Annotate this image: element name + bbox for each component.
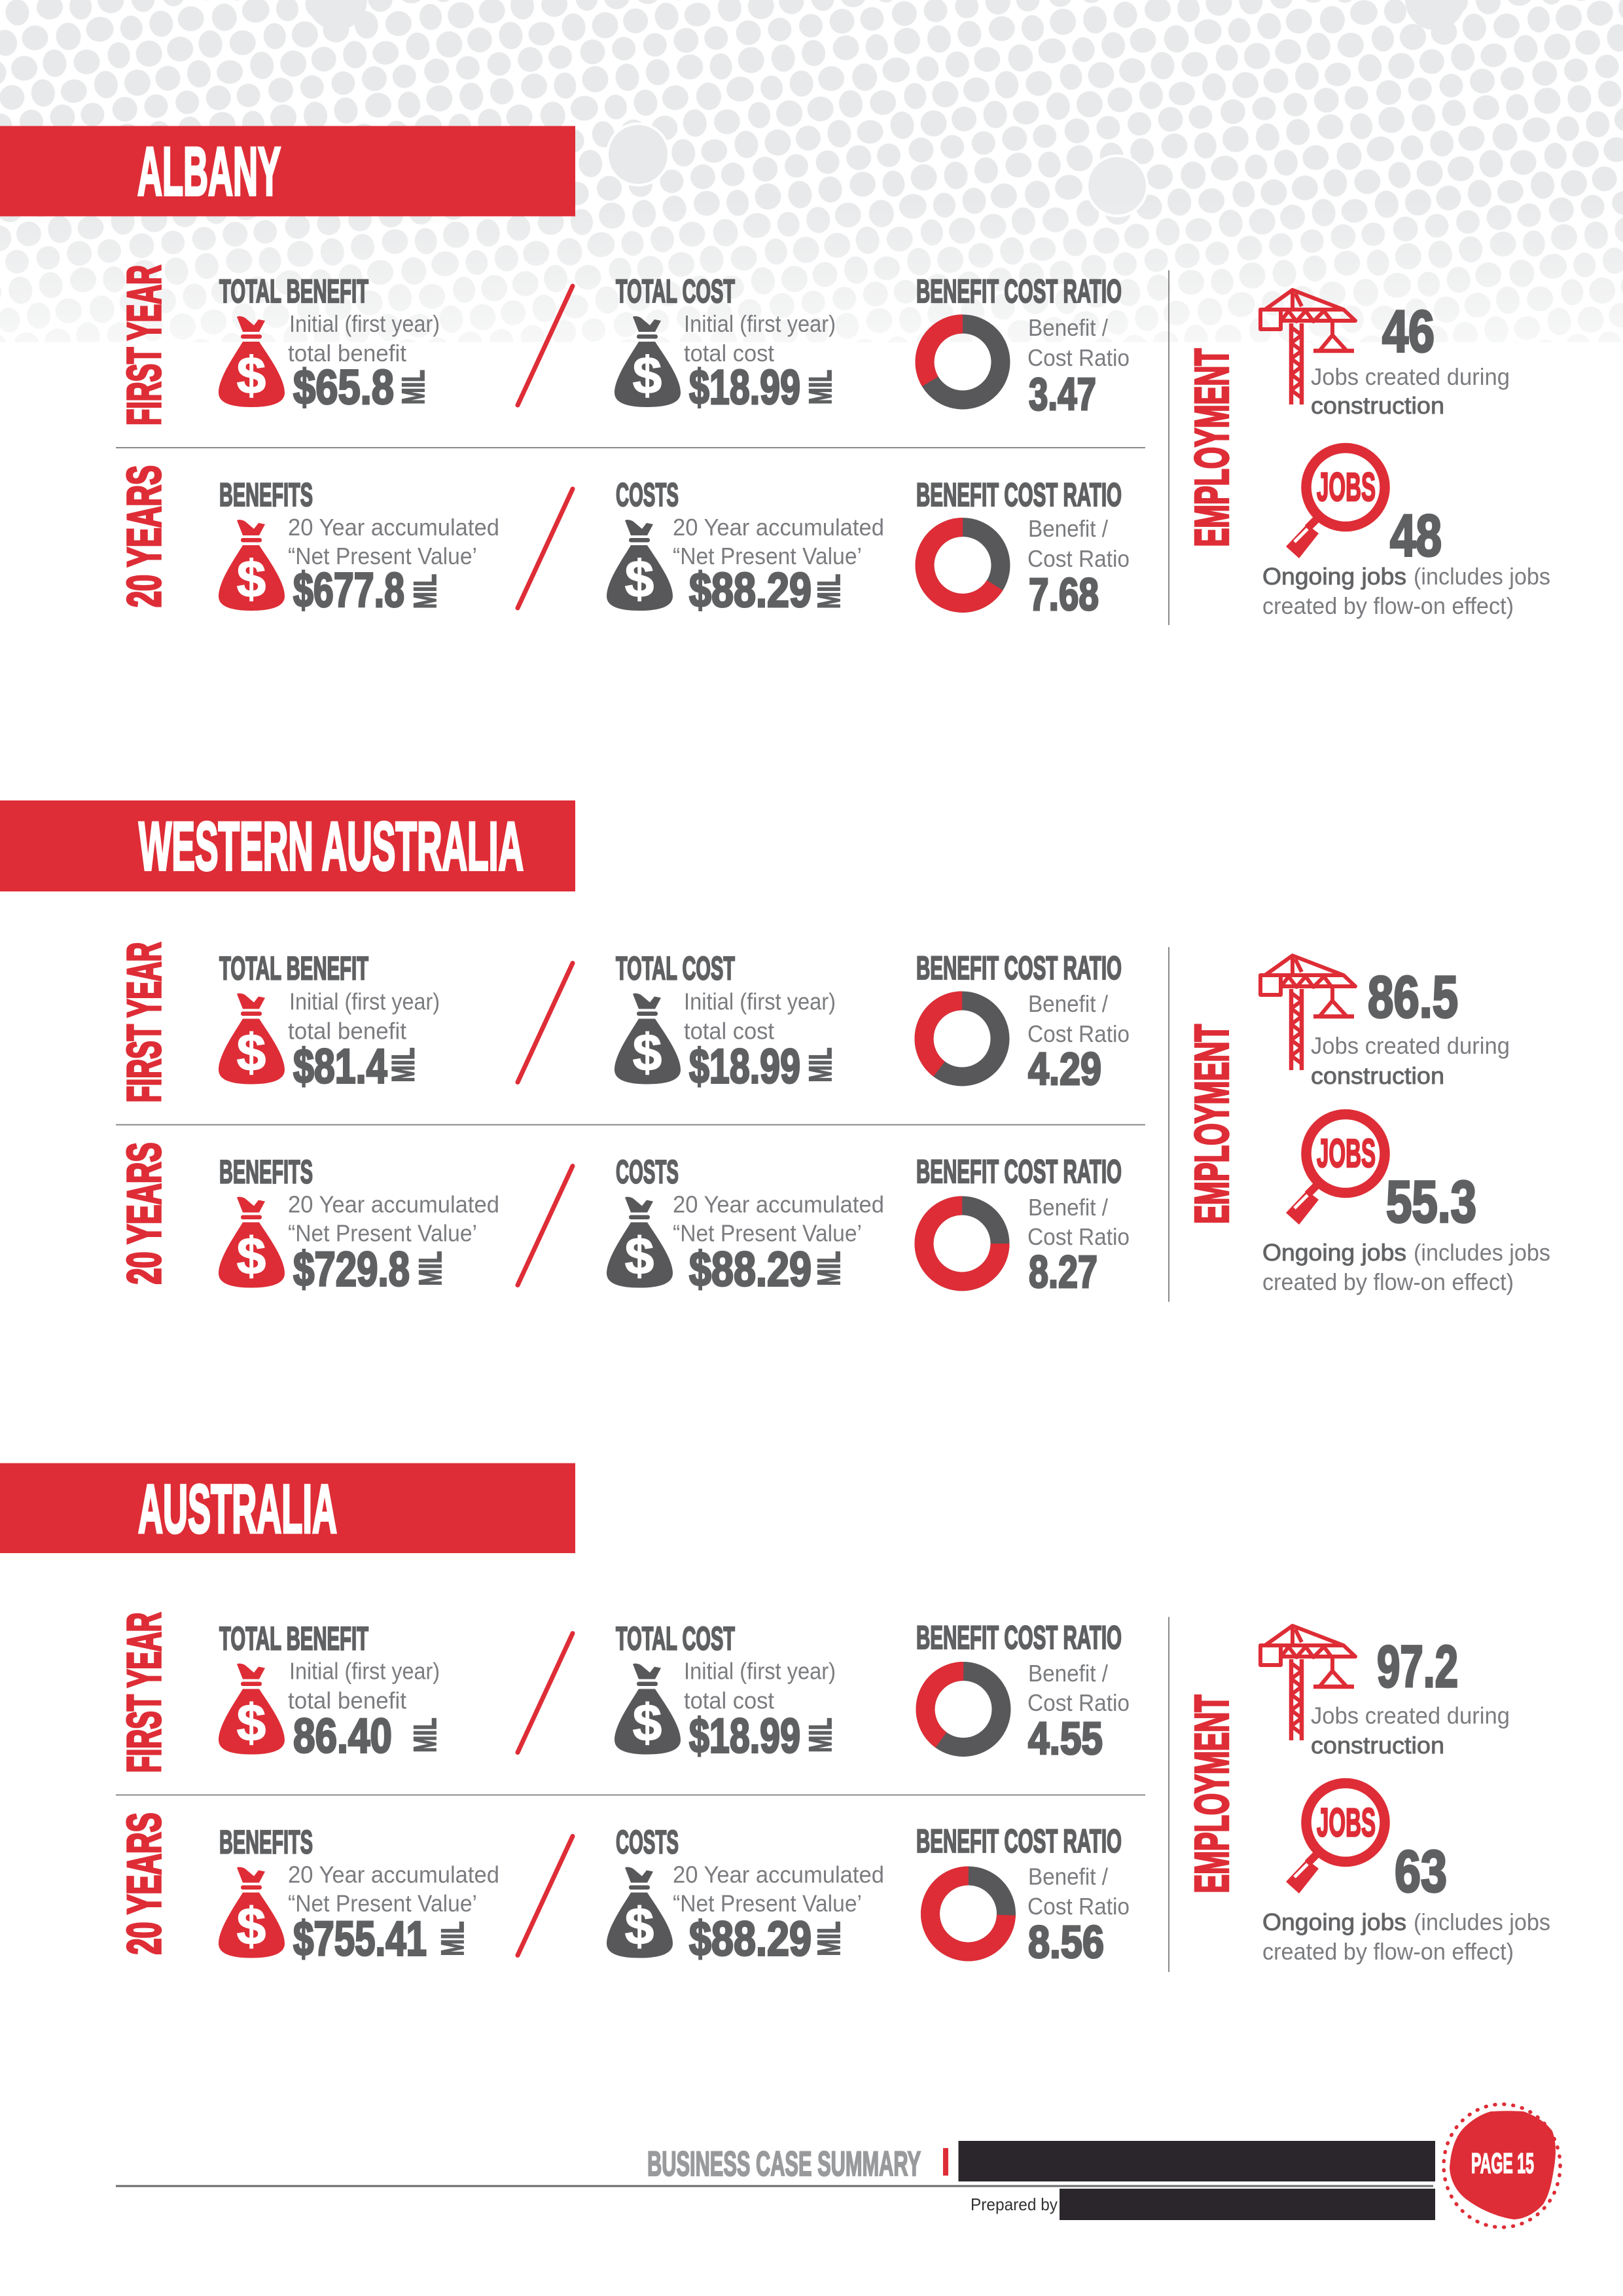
employment block (1186, 290, 1550, 619)
total cost block: MIL (804, 370, 838, 404)
benefits block: $ (237, 550, 266, 608)
total cost block: TOTAL COST (616, 950, 735, 987)
employment block: JOBS (1317, 1800, 1376, 1844)
redacted bar: bottom (1060, 2189, 1435, 2220)
benefits block: MIL (408, 574, 443, 609)
costs block: 20 Year accumulated (673, 1191, 884, 1217)
employment block: (includes jobs (1414, 1909, 1550, 1935)
benefits block: BENEFITS (219, 1823, 313, 1860)
benefit cost ratio 20 years: BENEFIT COST RATIO (916, 1823, 1122, 1859)
total cost block: MIL (804, 1047, 838, 1083)
benefits block: 20 Year accumulated (288, 1861, 499, 1888)
page badge (1444, 2104, 1560, 2227)
benefits block: BENEFITS (219, 1153, 313, 1190)
benefit cost ratio 20 years: 8.27 (1029, 1246, 1097, 1297)
benefits block: 20 Year accumulated (288, 514, 499, 541)
employment block: 63 (1395, 1839, 1447, 1905)
employment block (1186, 956, 1550, 1295)
costs block: $88.29 (689, 563, 812, 617)
benefit cost ratio first year: Benefit / (1028, 314, 1108, 341)
total benefit block: TOTAL BENEFIT (219, 1621, 368, 1657)
row label: 20 years: 20 YEARS (118, 465, 171, 607)
benefits block (219, 1823, 499, 1966)
benefit cost ratio first year: 4.29 (1028, 1043, 1101, 1094)
left columns, first year and 20 years (116, 942, 1145, 1296)
slash divider (518, 1166, 573, 1285)
total cost block: total cost (684, 1017, 774, 1045)
costs block: COSTS (616, 1153, 679, 1190)
employment block: construction (1311, 392, 1444, 419)
benefit cost ratio first year: Cost Ratio (1027, 1689, 1130, 1716)
benefits block: $ (237, 1227, 266, 1285)
benefits block: BENEFITS (219, 476, 313, 513)
total benefit block: total benefit (288, 1017, 406, 1045)
slash divider (518, 1837, 573, 1956)
benefit cost ratio 20 years: Cost Ratio (1027, 1223, 1130, 1250)
heading bar: Albany: ALBANY (137, 134, 281, 210)
employment block: Jobs created during (1311, 1032, 1510, 1059)
total benefit block: TOTAL BENEFIT (219, 950, 368, 987)
benefits block: $677.8 (293, 563, 404, 617)
total benefit block: $ (237, 1024, 266, 1081)
row label: first year: FIRST YEAR (118, 265, 171, 425)
heading bar: Albany (0, 126, 575, 216)
total cost block (615, 950, 838, 1093)
footer (116, 2104, 1560, 2227)
costs block (607, 476, 884, 617)
benefit cost ratio first year: Cost Ratio (1027, 1020, 1130, 1047)
total cost block (615, 273, 838, 414)
costs block: COSTS (616, 1823, 679, 1860)
costs block: 20 Year accumulated (673, 1861, 884, 1888)
total cost block: Initial (first year) (684, 988, 836, 1014)
total cost block (615, 1621, 838, 1763)
total benefit block: $ (237, 1694, 266, 1751)
employment block: created by flow-on effect) (1262, 592, 1514, 619)
benefits block (219, 476, 499, 617)
total benefit block: $81.4 (293, 1039, 387, 1093)
costs block: $ (625, 550, 654, 608)
benefit cost ratio 20 years: BENEFIT COST RATIO (916, 1153, 1122, 1190)
total cost block: total cost (684, 1687, 774, 1713)
employment block: 46 (1382, 299, 1435, 365)
total benefit block: Initial (first year) (289, 1657, 440, 1685)
benefit cost ratio first year: 3.47 (1029, 368, 1096, 420)
total cost block: $ (633, 1024, 662, 1081)
row label: 20 years: 20 YEARS (118, 1143, 171, 1284)
costs block: $88.29 (689, 1242, 812, 1296)
total benefit block: Initial (first year) (289, 988, 440, 1014)
benefit cost ratio 20 years: Benefit / (1028, 515, 1108, 542)
total benefit block: MIL (387, 1047, 421, 1083)
total cost block: total cost (684, 340, 774, 367)
benefits block (219, 1153, 499, 1296)
total benefit block (219, 273, 440, 414)
employment block: 55.3 (1386, 1170, 1476, 1235)
employment block: JOBS (1317, 1131, 1376, 1175)
benefit cost ratio first year: BENEFIT COST RATIO (916, 950, 1122, 986)
total benefit block: Initial (first year) (289, 310, 440, 337)
employment block: construction (1311, 1732, 1444, 1759)
heading bar: Western Australia: WESTERN AUSTRALIA (139, 808, 524, 885)
employment block: EMPLOYMENT (1186, 1024, 1238, 1224)
total cost block: $18.99 (689, 360, 800, 414)
employment block: 86.5 (1368, 965, 1458, 1030)
benefit cost ratio first year (910, 1619, 1130, 1764)
employment block: JOBS (1317, 465, 1376, 509)
benefits block: “Net Present Value’ (288, 1220, 477, 1246)
costs block: “Net Present Value’ (673, 1220, 862, 1246)
benefits block: “Net Present Value’ (288, 1890, 477, 1916)
employment block: Jobs created during (1311, 1702, 1510, 1729)
total cost block: $18.99 (689, 1039, 800, 1093)
total cost block: $18.99 (689, 1708, 800, 1763)
employment block: (includes jobs (1414, 1239, 1550, 1266)
benefits block: MIL (414, 1251, 448, 1285)
row label: first year: FIRST YEAR (118, 942, 171, 1102)
left columns, first year and 20 years (116, 1613, 1145, 1966)
page badge: PAGE 15 (1471, 2147, 1534, 2179)
costs block (607, 1153, 884, 1296)
benefit cost ratio 20 years: Cost Ratio (1027, 1893, 1130, 1920)
benefit cost ratio first year: 4.55 (1028, 1713, 1103, 1764)
costs block: 20 Year accumulated (673, 514, 884, 541)
employment block: created by flow-on effect) (1262, 1938, 1514, 1965)
benefit cost ratio 20 years: 7.68 (1029, 569, 1099, 620)
benefit cost ratio 20 years (910, 476, 1130, 620)
benefit cost ratio first year (910, 273, 1130, 420)
benefit cost ratio 20 years (916, 1153, 1130, 1297)
employment block: Ongoing jobs (1262, 1239, 1406, 1266)
benefits block: MIL (436, 1922, 471, 1956)
employment block: EMPLOYMENT (1186, 348, 1238, 547)
total cost block: TOTAL COST (616, 1621, 735, 1657)
background dot pattern (0, 0, 1623, 342)
benefit cost ratio 20 years (916, 1823, 1130, 1967)
total cost block: MIL (804, 1717, 838, 1753)
costs block: MIL (812, 1251, 847, 1285)
panel: Western Australia (0, 800, 1550, 1302)
slash divider (518, 963, 573, 1083)
employment block: EMPLOYMENT (1186, 1695, 1238, 1893)
heading bar: Australia: AUSTRALIA (138, 1471, 337, 1547)
benefits block: $ (237, 1897, 266, 1956)
total benefit block: MIL (408, 1717, 443, 1753)
total benefit block: total benefit (288, 1687, 406, 1713)
benefit cost ratio first year: Cost Ratio (1027, 344, 1130, 371)
slash divider (518, 286, 573, 405)
employment block: 48 (1390, 503, 1442, 569)
employment block: construction (1311, 1062, 1444, 1089)
benefit cost ratio first year: BENEFIT COST RATIO (916, 1619, 1122, 1656)
employment block: Ongoing jobs (1262, 563, 1406, 590)
prepared by label: Prepared by (971, 2195, 1058, 2214)
costs block: $ (625, 1227, 654, 1285)
benefit cost ratio 20 years: Benefit / (1028, 1194, 1108, 1221)
panel: Albany (0, 126, 1550, 625)
heading bar: Western Australia (0, 800, 575, 891)
total cost block: TOTAL COST (616, 273, 735, 310)
total benefit block (219, 950, 440, 1093)
slash divider (518, 1634, 573, 1753)
total benefit block: $65.8 (293, 360, 394, 414)
employment block: Jobs created during (1311, 363, 1510, 390)
benefits block: 20 Year accumulated (288, 1191, 499, 1217)
benefits block: $755.41 (293, 1911, 427, 1966)
benefit cost ratio first year (909, 950, 1130, 1094)
benefit cost ratio first year: Benefit / (1028, 1660, 1108, 1687)
total benefit block: MIL (397, 370, 431, 404)
total benefit block: 86.40 (293, 1708, 392, 1763)
total benefit block (219, 1621, 443, 1763)
benefit cost ratio 20 years: BENEFIT COST RATIO (916, 476, 1122, 513)
costs block: $88.29 (689, 1911, 812, 1966)
row label: first year: FIRST YEAR (118, 1613, 171, 1772)
row label: 20 years: 20 YEARS (118, 1813, 171, 1954)
panel: Australia (0, 1463, 1550, 1972)
total cost block: Initial (first year) (684, 310, 836, 337)
total benefit block: $ (237, 346, 266, 404)
costs block (607, 1823, 884, 1966)
benefit cost ratio 20 years: 8.56 (1028, 1916, 1104, 1967)
benefit cost ratio 20 years: Cost Ratio (1027, 545, 1130, 572)
benefit cost ratio first year: BENEFIT COST RATIO (916, 273, 1122, 310)
benefits block: $729.8 (293, 1242, 410, 1296)
total cost block: $ (633, 346, 662, 404)
benefit cost ratio 20 years: Benefit / (1028, 1863, 1108, 1890)
total benefit block: total benefit (288, 340, 406, 367)
total cost block: Initial (first year) (684, 1657, 836, 1685)
costs block: “Net Present Value’ (673, 1890, 862, 1916)
employment block: 97.2 (1377, 1634, 1458, 1700)
costs block: MIL (812, 574, 847, 609)
employment block: (includes jobs (1414, 563, 1550, 590)
employment block: Ongoing jobs (1262, 1909, 1406, 1935)
employment block: created by flow-on effect) (1262, 1268, 1514, 1295)
heading bar: Australia (0, 1463, 575, 1553)
benefits block: “Net Present Value’ (288, 543, 477, 569)
costs block: COSTS (616, 476, 679, 513)
benefit cost ratio first year: Benefit / (1028, 990, 1108, 1017)
employment block (1186, 1626, 1550, 1965)
costs block: $ (625, 1897, 654, 1956)
total benefit block: TOTAL BENEFIT (219, 273, 368, 310)
costs block: “Net Present Value’ (673, 543, 862, 569)
costs block: MIL (812, 1922, 847, 1956)
footer title: BUSINESS CASE SUMMARY (647, 2145, 921, 2183)
redacted bar: top (958, 2141, 1435, 2181)
slash divider (518, 489, 573, 608)
total cost block: $ (633, 1694, 662, 1751)
